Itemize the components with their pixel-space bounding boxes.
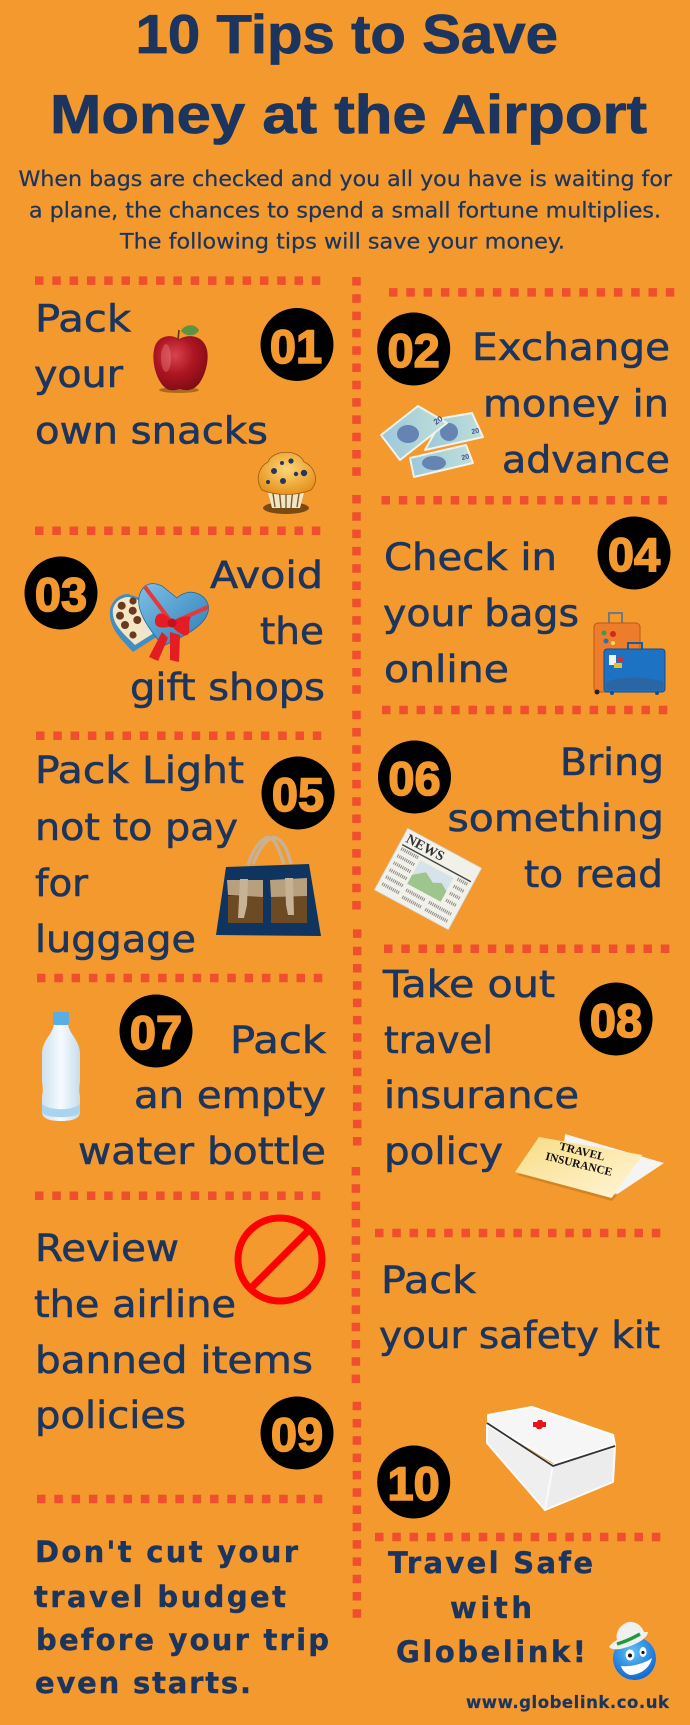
tip 05 number badge	[262, 756, 334, 830]
icon: newspaper: NEWS	[403, 832, 447, 865]
icon: first aid box	[487, 1407, 615, 1510]
tip 02 text: advance	[502, 438, 670, 481]
closing message: even starts.	[35, 1666, 251, 1700]
tip 10 text	[379, 1259, 660, 1357]
tip 09 text	[34, 1227, 313, 1437]
tip 06 text: to read	[524, 853, 663, 896]
tip 02 text: Exchange	[472, 326, 670, 369]
icon: banknotes	[381, 406, 483, 477]
tip 09 text: Review	[35, 1227, 179, 1270]
tip 07 number badge: 07	[130, 1006, 182, 1059]
panel: tip 04 check in bags online	[383, 516, 670, 695]
icon: globelink mascot	[609, 1622, 656, 1680]
icon: banknotes: 20	[461, 453, 470, 462]
tip 04 number badge	[598, 516, 670, 590]
tip 10 text: your safety kit	[379, 1314, 660, 1357]
tip 01 number badge	[260, 308, 334, 381]
tip 01 text: your	[34, 353, 124, 396]
icon: banknotes: 20	[471, 427, 480, 436]
tip 04 number badge: 04	[608, 528, 660, 581]
tip 02 text	[472, 326, 670, 481]
tip 03 text: gift shops	[130, 666, 325, 709]
tip 09 text: the airline	[34, 1283, 236, 1326]
panel: tip 01 pack your own snacks	[34, 297, 334, 514]
panel: tip 02 exchange money	[377, 312, 670, 481]
tip 02 text: money in	[483, 382, 669, 426]
intro text: a plane, the chances to spend a small fortune multiplies.	[29, 198, 661, 222]
tip 10 text: Pack	[381, 1259, 477, 1302]
tip 05 text: for	[35, 862, 89, 905]
icon: suitcases	[594, 613, 665, 695]
intro text	[18, 167, 672, 254]
tip 01 text	[34, 297, 268, 452]
icon: insurance folder: INSURANCE	[544, 1151, 614, 1179]
tip 04 text: your bags	[383, 592, 579, 635]
closing message: before your trip	[36, 1623, 329, 1657]
icon: chocolate gift box	[110, 584, 208, 662]
tip 01 number badge: 01	[270, 320, 322, 373]
tip 07 text	[78, 1019, 327, 1173]
tip 08 text	[382, 963, 579, 1173]
tip 05 text: luggage	[35, 918, 196, 961]
panel: tip 10 pack your safety kit	[377, 1259, 660, 1518]
icon: insurance folder: TRAVEL	[558, 1141, 606, 1164]
icon: banknotes: 20	[432, 414, 445, 427]
title	[50, 3, 647, 145]
tip 09 number badge	[260, 1396, 334, 1470]
tip 06 text	[448, 741, 664, 896]
tip 06 text: Bring	[560, 741, 664, 784]
travel safe message	[388, 1546, 593, 1669]
closing message	[34, 1535, 329, 1700]
travel safe message: Globelink!	[396, 1635, 586, 1669]
title: Money at the Airport	[50, 83, 647, 145]
title: 10 Tips to Save	[136, 3, 558, 65]
icon: newspaper	[374, 828, 482, 930]
tip 01 text: Pack	[35, 297, 132, 340]
tip 09 text: policies	[35, 1394, 186, 1437]
tip 08 text: insurance	[384, 1074, 579, 1117]
panel: tip 05 pack light	[35, 749, 334, 961]
travel safe message: Travel Safe	[388, 1546, 593, 1580]
tip 04 text: Check in	[384, 536, 557, 579]
closing message: travel budget	[34, 1580, 286, 1614]
panel: tip 07 empty water bottle	[42, 994, 327, 1173]
tip 03 text: the	[260, 610, 324, 653]
tip 05 text	[35, 749, 244, 961]
tip 06 number badge	[378, 740, 451, 814]
travel safe message: with	[450, 1591, 532, 1625]
tip 06 text: something	[448, 797, 664, 840]
panel: tip 08 travel insurance	[382, 963, 664, 1201]
tip 03 number badge	[24, 556, 98, 630]
tip 10 number badge: 10	[388, 1457, 440, 1510]
icon: prohibited sign	[238, 1218, 322, 1301]
tip 08 number badge: 08	[590, 994, 642, 1047]
tip 07 number badge	[120, 994, 192, 1068]
icon: insurance folder	[515, 1134, 664, 1201]
tip 07 text: water bottle	[78, 1130, 326, 1173]
website address: www.globelink.co.uk	[466, 1693, 670, 1712]
tip 01 text: own snacks	[35, 410, 268, 452]
tip 08 text: policy	[384, 1130, 503, 1173]
tip 08 text: Take out	[382, 963, 555, 1006]
tip 04 text	[383, 536, 579, 691]
tip 03 text	[130, 554, 325, 709]
icon: apple	[153, 325, 208, 393]
tip 08 text: travel	[384, 1019, 493, 1062]
panel: tip 06 bring something to read	[374, 740, 664, 930]
tip 05 number badge: 05	[272, 768, 324, 821]
tip 07 text: Pack	[230, 1019, 327, 1062]
tip 02 number badge: 02	[388, 324, 440, 377]
intro text: The following tips will save your money.	[119, 230, 565, 254]
tip 10 number badge	[377, 1446, 450, 1518]
tip 05 text: Pack Light	[35, 749, 244, 792]
tip 06 number badge: 06	[388, 752, 441, 805]
tip 03 number badge: 03	[35, 568, 87, 621]
closing message: Don't cut your	[35, 1535, 299, 1569]
tip 05 text: not to pay	[35, 806, 238, 849]
tip 07 text: an empty	[134, 1074, 326, 1117]
icon: muffin	[258, 452, 315, 514]
intro text: When bags are checked and you all you have is waiting for	[18, 167, 672, 191]
tip 03 text: Avoid	[210, 554, 323, 597]
tip 09 number badge: 09	[271, 1408, 323, 1461]
tip 04 text: online	[384, 648, 509, 691]
tip 08 number badge	[580, 982, 652, 1056]
panel: tip 09 review banned items	[34, 1218, 334, 1470]
icon: water bottle	[42, 1012, 80, 1121]
tip 02 number badge	[377, 312, 450, 386]
tip 09 text: banned items	[35, 1339, 313, 1382]
panel: tip 03 avoid the gift shops	[24, 554, 325, 709]
icon: handbag	[216, 838, 321, 936]
